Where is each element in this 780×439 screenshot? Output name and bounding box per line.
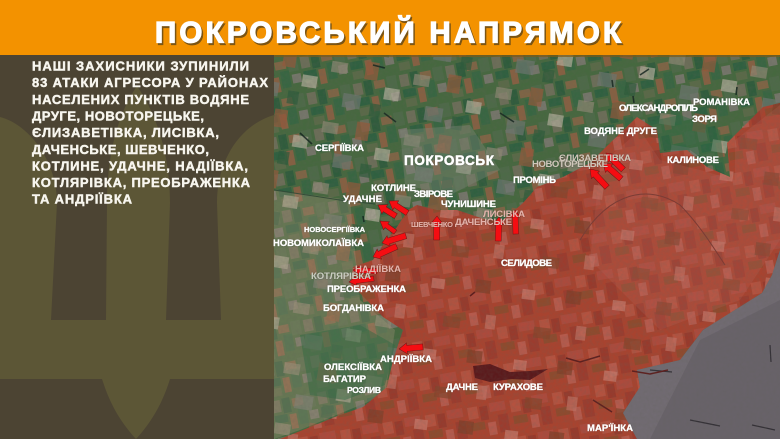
Kurakhove reservoir [473,364,548,382]
header banner [0,0,780,55]
sidebar text block: ТА АНДРІЇВКА [32,192,133,206]
label: Мар'їнка: МАР'ЇНКА [587,423,633,434]
gray zone [623,250,780,439]
rivers [470,292,668,412]
sidebar text block: КОТЛИНЕ, УДАЧНЕ, НАДІЇВКА, [32,158,248,174]
sidebar text block: ЄЛИЗАВЕТІВКА, ЛИСІВКА, [32,125,219,140]
label: Преображенка: ПРЕОБРАЖЕНКА [327,284,406,295]
label: Розлив: РОЗЛИВ [347,385,381,395]
icon: trident emblem [0,86,274,439]
title: ПОКРОВСЬКИЙ НАПРЯМОК [156,18,623,52]
label: Новосергіївка: НОВОСЕРГІЇВКА [304,225,366,234]
water bodies in the green zone [300,65,737,222]
label: Дачне: ДАЧНЕ [446,382,478,393]
label: Єлизаветівка: ЄЛИЗАВЕТІВКА [559,153,631,164]
occupied territory [280,103,780,439]
arrows: red attack directions [348,149,627,354]
label: Багатир: БАГАТИР [323,374,367,385]
label: Калинове: КАЛИНОВЕ [667,155,719,166]
label: Лисівка: ЛИСІВКА [483,209,525,220]
map place labels [273,97,750,434]
label: Водяне Друге: ВОДЯНЕ ДРУГЕ [584,126,657,137]
map [274,55,780,439]
label: Романівка: РОМАНІВКА [693,97,750,108]
label: Сергіївка: СЕРГІЇВКА [315,143,364,154]
label: Андріївка: АНДРІЇВКА [380,354,432,365]
label: Курахове: КУРАХОВЕ [493,382,543,393]
label: Звірове: ЗВІРОВЕ [414,189,453,200]
label: Удачне: УДАЧНЕ [343,194,382,205]
sidebar text block [32,58,268,206]
label: Селидове: СЕЛИДОВЕ [501,258,552,269]
label: Промінь: ПРОМІНЬ [513,175,556,186]
panel: text sidebar with trident [0,55,274,439]
sidebar text block: КОТЛЯРІВКА, ПРЕОБРАЖЕНКА [32,175,251,190]
sidebar text block: ДРУГЕ, НОВОТОРЕЦЬКЕ, [32,108,204,124]
label: Шевченко: ШЕВЧЕНКО [411,220,453,229]
label: Котлярівка: КОТЛЯРІВКА [311,271,371,282]
label: Покровськ: ПОКРОВСЬК [404,153,495,168]
sidebar text block: ДАЧЕНСЬКЕ, ШЕВЧЕНКО, [32,142,209,157]
label: Новомиколаївка: НОВОМИКОЛАЇВКА [273,238,364,249]
label: Богданівка: БОГДАНІВКА [323,303,384,314]
label: Надіївка: НАДІЇВКА [355,264,401,275]
label: Зоря: ЗОРЯ [692,114,717,125]
sidebar text block: НАСЕЛЕНИХ ПУНКТІВ ВОДЯНЕ [32,92,249,107]
label: Котлине: КОТЛИНЕ [371,183,416,194]
sidebar text block: НАШІ ЗАХИСНИКИ ЗУПИНИЛИ [32,58,249,74]
title: ПОКРОВСЬКИЙ НАПРЯМОК [155,16,622,50]
sidebar text block: 83 АТАКИ АГРЕСОРА У РАЙОНАХ [32,75,268,90]
label: Олександропіль: ОЛЕКСАНДРОПІЛЬ [619,103,698,114]
label: Олексіївка: ОЛЕКСІЇВКА [324,362,382,373]
lighter pink fields in the north-east [590,105,780,330]
label: Даченське: ДАЧЕНСЬКЕ [455,217,512,228]
label: Новоторецьке: НОВОТОРЕЦЬКЕ [532,159,608,170]
label: Чунишине: ЧУНИШИНЕ [441,199,496,210]
